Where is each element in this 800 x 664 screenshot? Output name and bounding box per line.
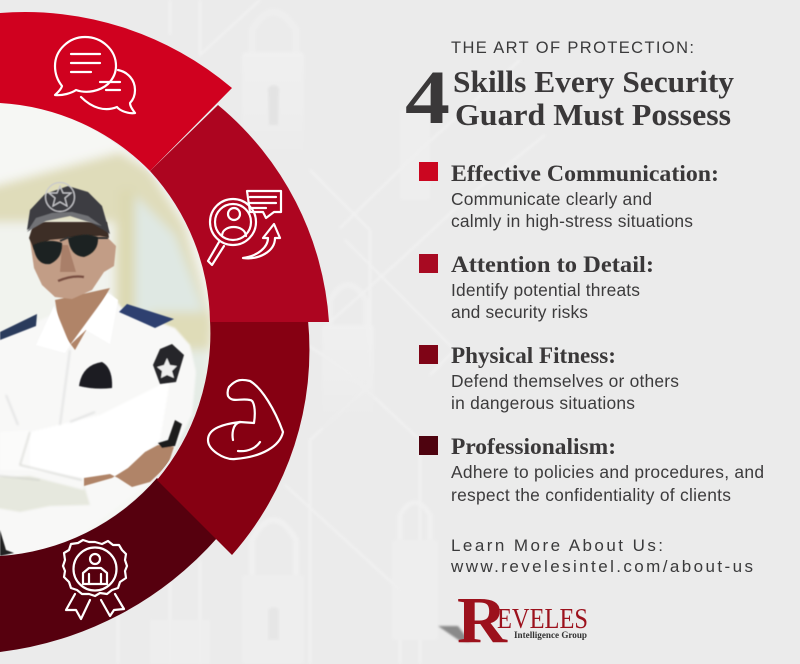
- guard body: [0, 302, 196, 512]
- skill description: Communicate clearly and: [451, 189, 652, 209]
- skill: professionalism: [419, 434, 764, 505]
- ring segment: professionalism: [0, 478, 218, 652]
- cap: [27, 182, 110, 234]
- skill: effective communication: [419, 161, 719, 231]
- skill heading: Physical Fitness:: [451, 343, 616, 368]
- skill description: Adhere to policies and procedures, and: [451, 462, 764, 482]
- neck and face: [29, 222, 116, 350]
- skill description: calmly in high-stress situations: [451, 211, 693, 231]
- skill heading: Effective Communication:: [451, 161, 719, 186]
- call to action: www.revelesintel.com/about-us: [450, 557, 753, 576]
- background lock pattern: [118, 0, 545, 664]
- sunglasses: [33, 235, 108, 264]
- photo background: [0, 103, 210, 532]
- ring segment: attention to detail: [150, 105, 329, 322]
- skill description: Defend themselves or others: [451, 371, 679, 391]
- title numeral: 4: [405, 56, 450, 140]
- logo wordmark R: R: [457, 584, 508, 657]
- skill description: respect the confidentiality of clients: [451, 485, 731, 505]
- title line two: Guard Must Possess: [455, 97, 731, 132]
- icon: flexed arm: [208, 380, 283, 459]
- logo tagline: Intelligence Group: [514, 631, 587, 641]
- uniform patches: [79, 344, 184, 389]
- bullet: [419, 345, 438, 364]
- skill description: Identify potential threats: [451, 280, 640, 300]
- icon: magnifier with profile: [208, 191, 281, 265]
- logo shadow: [438, 626, 470, 642]
- bullet: [419, 162, 438, 181]
- skill heading: Professionalism:: [451, 434, 616, 459]
- skill: attention to detail: [419, 252, 654, 322]
- skill description: and security risks: [451, 302, 588, 322]
- collar and epaulettes: [0, 293, 174, 344]
- bullet: [419, 436, 438, 455]
- call to action: Learn More About Us:: [451, 536, 663, 555]
- logo: [438, 584, 588, 657]
- skill: physical fitness: [419, 343, 679, 413]
- title line one: Skills Every Security: [453, 64, 734, 99]
- ring segment: effective communication: [0, 12, 232, 171]
- logo wordmark EVELES: EVELES: [497, 603, 588, 635]
- ring segment: physical fitness: [157, 320, 309, 555]
- bullet: [419, 254, 438, 273]
- icon: speech bubbles: [55, 37, 135, 113]
- photo: security guard: [0, 103, 210, 556]
- skill description: in dangerous situations: [451, 393, 635, 413]
- icon: award ribbon: [63, 540, 127, 619]
- skill heading: Attention to Detail:: [451, 252, 654, 277]
- hand and walkie-talkie: [0, 420, 182, 556]
- heading eyebrow: THE ART OF PROTECTION:: [451, 39, 694, 57]
- title: [405, 56, 734, 140]
